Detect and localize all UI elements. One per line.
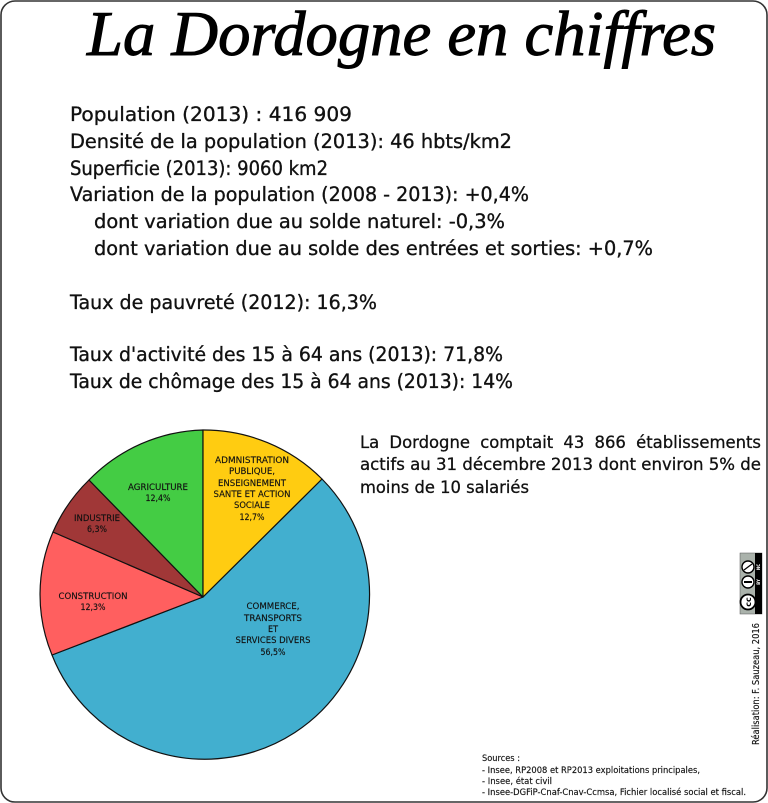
label: administration: ADMNISTRATION [215,456,289,466]
pie labels [58,456,311,658]
key figures text block: Superficie (2013): 9060 km2 [70,157,328,180]
key figures text block: Variation de la population (2008 - 2013): +0,4% [70,183,529,206]
key figures text block [69,103,653,393]
label: agriculture: 12,4% [146,494,170,504]
label: industrie: INDUSTRIE [74,514,120,524]
sources [482,754,746,798]
icon: creative commons badge: NC [756,564,761,570]
label: administration: SOCIALE [234,501,270,511]
title: La Dordogne en chiffres [86,0,716,69]
label: commerce: 56,5% [260,648,286,658]
label: commerce: TRANSPORTS [243,614,302,624]
slice: industrie [53,480,203,597]
pie chart: establishments by sector [40,430,370,759]
slice: administration publique [203,430,322,597]
sources: - Insee-DGFiP-Cnaf-Cnav-Ccmsa, Fichier localisé social et fiscal. [482,787,746,798]
label: administration: SANTE ET ACTION [214,490,290,500]
key figures text block: Taux de chômage des 15 à 64 ans (2013): 14% [69,370,513,393]
key figures text block: dont variation due au solde des entrées et sorties: +0,7% [94,237,653,260]
establishments paragraph: La Dordogne comptait 43 866 établissements [360,433,761,452]
label: construction: CONSTRUCTION [58,592,128,602]
label: commerce: ET [268,625,279,635]
key figures text block: Taux de pauvreté (2012): 16,3% [69,291,377,314]
key figures text block: dont variation due au solde naturel: -0,3% [94,210,505,233]
label: administration: PUBLIQUE, [229,467,275,477]
sources: Sources : [482,754,520,764]
label: industrie [74,514,120,535]
slice: construction [40,532,203,655]
label: agriculture: AGRICULTURE [128,483,188,493]
label: construction [58,592,128,613]
label: administration: 12,7% [240,513,264,523]
label: construction: 12,3% [80,603,106,613]
label: administration: ENSEIGNEMENT [218,479,287,489]
label: administration [214,456,290,523]
establishments paragraph: actifs au 31 décembre 2013 dont environ 5% de [360,455,761,474]
key figures text block: Densité de la population (2013): 46 hbts/km2 [70,130,512,153]
key figures text block: Population (2013) : 416 909 [70,103,352,126]
icon: creative commons badge: BY [756,579,761,585]
label: agriculture [128,483,188,504]
establishments paragraph [360,433,761,497]
label: commerce [236,602,311,658]
key figures text block: Taux d'activité des 15 à 64 ans (2013): 71,8% [69,343,503,366]
author credit: Réalisation: F. Sauzeau, 2016 [750,623,762,745]
slice: commerce, transports, services [52,479,370,759]
label: commerce: SERVICES DIVERS [236,636,311,646]
label: industrie: 6,3% [87,525,107,535]
icon: creative commons badge [740,553,762,614]
label: commerce: COMMERCE, [246,602,300,612]
icon: creative commons badge: cc [744,597,753,607]
sources: - Insee, RP2008 et RP2013 exploitations principales, [482,766,700,776]
slice: agriculture [89,430,203,597]
establishments paragraph: moins de 10 salariés [360,478,529,497]
sources: - Insee, état civil [482,776,552,787]
